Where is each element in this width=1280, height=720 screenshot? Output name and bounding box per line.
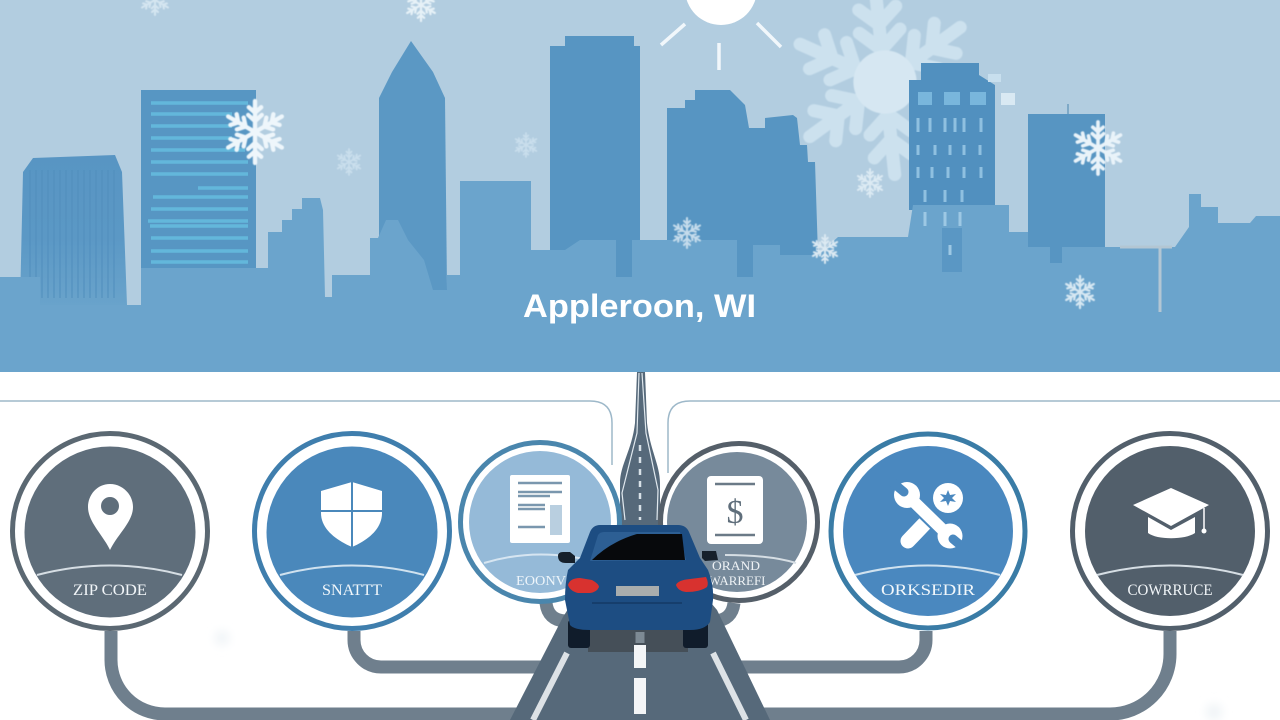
faint background marks <box>215 631 1222 720</box>
gray pole <box>1120 247 1172 312</box>
road <box>510 590 770 720</box>
icon: crossed wrench and screwdriver <box>892 482 965 549</box>
title: Appleroon, WI <box>523 288 756 324</box>
city foreground silhouette <box>0 181 1280 372</box>
connectors <box>111 603 1170 714</box>
building: round tower <box>20 155 127 305</box>
icon: dollar page <box>707 476 763 544</box>
circle: safety: SNATTT <box>322 582 382 599</box>
circle: dollar document <box>660 444 818 600</box>
circle: cost document: EOONV <box>516 574 566 589</box>
icon: sun with rays <box>661 0 781 70</box>
panel: winter city skyline <box>0 0 1280 372</box>
icon: dollar page: $ <box>726 494 744 531</box>
circle: wrench and tools: ORKSEDIR <box>881 582 975 599</box>
circle: safety <box>254 434 450 628</box>
building: right tower <box>1028 104 1105 263</box>
circle: graduation cap: COWRRUCE <box>1128 582 1212 599</box>
panel outlines <box>0 401 1280 473</box>
building: stepped block <box>667 90 818 277</box>
icon: map pin <box>88 484 133 550</box>
lower tower column <box>925 212 962 272</box>
circle: dollar document: WARREFI <box>708 573 766 588</box>
circle: dollar document: ORAND <box>712 558 760 573</box>
large translucent snowflake <box>785 0 985 184</box>
building: spire tower <box>379 41 447 290</box>
icon: shield <box>321 482 382 547</box>
icon: graduation cap <box>1133 488 1209 538</box>
building: tall block <box>550 36 640 277</box>
circle: cost document <box>460 442 620 602</box>
narrow upper road <box>620 372 660 530</box>
snowflakes <box>140 0 1123 308</box>
building: striped office block <box>141 90 256 270</box>
car <box>558 525 718 648</box>
circle: zip code: ZIP CODE <box>73 582 147 599</box>
circle: zip code <box>12 434 208 628</box>
circle: wrench and tools <box>831 434 1025 628</box>
icon: document <box>510 475 570 543</box>
building: windowed tower <box>909 63 1015 210</box>
circle: graduation cap <box>1072 434 1268 628</box>
